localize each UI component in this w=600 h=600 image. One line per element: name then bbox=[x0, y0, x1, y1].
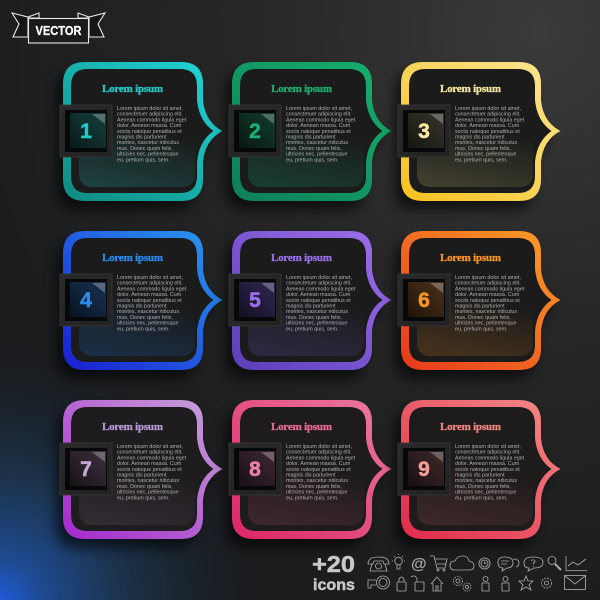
icon: magnifier bbox=[548, 556, 561, 570]
panel: card 1 bbox=[56, 62, 222, 210]
panel: card 8: Aenean commodo ligula eget bbox=[286, 455, 356, 461]
panel: card 5: magnis dis parturient bbox=[286, 304, 336, 310]
panel: card 6: 6 bbox=[418, 289, 430, 312]
icon: person two bbox=[502, 576, 509, 591]
panel: card 5: sociis natoque penatibus et bbox=[286, 298, 351, 304]
panel: card 1: Lorem ipsum bbox=[102, 83, 163, 95]
panel: card 7: ultricies nec, pellentesque bbox=[117, 490, 179, 496]
panel: card 9: ultricies nec, pellentesque bbox=[455, 490, 517, 496]
icon: padlock bbox=[397, 577, 406, 591]
panel: card 2: consectetuer adipiscing elit. bbox=[286, 112, 352, 118]
panel: card 9: Lorem ipsum bbox=[440, 421, 501, 433]
panel: card 6: Lorem ipsum bbox=[440, 252, 501, 264]
panel: card 2: magnis dis parturient bbox=[286, 134, 336, 140]
panel: card 6: Aenean commodo ligula eget bbox=[455, 286, 525, 292]
panel: card 8: 8 bbox=[249, 458, 261, 481]
panel: card 3: mus. Donec quam felis, bbox=[455, 146, 511, 152]
icon: at sign: @ bbox=[411, 556, 427, 573]
panel: card 8: mus. Donec quam felis, bbox=[286, 484, 342, 490]
panel: card 5: mus. Donec quam felis, bbox=[286, 315, 342, 321]
panel: card 6: ultricies nec, pellentesque bbox=[455, 321, 517, 327]
panel: card 1: magnis dis parturient bbox=[117, 134, 167, 140]
panel: card 4: montes, nascetur ridiculus bbox=[117, 309, 179, 315]
panel: card 1: dolor. Aenean massa. Cum bbox=[117, 123, 182, 129]
panel: card 4: magnis dis parturient bbox=[117, 304, 167, 310]
icon: envelope bbox=[564, 576, 586, 590]
panel: card 9: eu, pretium quis, sem. bbox=[455, 495, 508, 501]
panel: card 6: magnis dis parturient bbox=[455, 304, 505, 310]
panel: card 5: consectetuer adipiscing elit. bbox=[286, 281, 352, 287]
panel: card 5 bbox=[225, 231, 392, 379]
panel: card 8: magnis dis parturient bbox=[286, 472, 336, 478]
panel: card 7: consectetuer adipiscing elit. bbox=[117, 450, 183, 456]
panel: card 5: Aenean commodo ligula eget bbox=[286, 286, 356, 292]
panel: card 1: Lorem ipsum dolor sit amet, bbox=[117, 106, 183, 112]
panel: card 4: dolor. Aenean massa. Cum bbox=[117, 292, 182, 298]
panel: card 2 bbox=[225, 62, 392, 210]
panel: card 2: sociis natoque penatibus et bbox=[286, 129, 351, 135]
panel: card 8: sociis natoque penatibus et bbox=[286, 467, 351, 473]
+20 icons caption bbox=[312, 551, 355, 594]
icon: clock bbox=[479, 558, 490, 569]
panel: card 1: eu, pretium quis, sem. bbox=[117, 157, 170, 163]
panel: card 9: montes, nascetur ridiculus bbox=[455, 478, 517, 484]
panel: card 3: consectetuer adipiscing elit. bbox=[455, 112, 521, 118]
panel: card 2: eu, pretium quis, sem. bbox=[286, 157, 339, 163]
icon: key bbox=[368, 576, 390, 589]
panel: card 2: Lorem ipsum dolor sit amet, bbox=[286, 106, 352, 112]
panel: card 7: 7 bbox=[80, 458, 92, 481]
icon set bbox=[368, 554, 587, 591]
panel: card 1: 1 bbox=[80, 120, 92, 143]
panel: card 6: mus. Donec quam felis, bbox=[455, 315, 511, 321]
panel: card 4: ultricies nec, pellentesque bbox=[117, 321, 179, 327]
panel: card 3: montes, nascetur ridiculus bbox=[455, 140, 517, 146]
panel: card 1: sociis natoque penatibus et bbox=[117, 129, 182, 135]
panel: card 7: Lorem ipsum bbox=[102, 421, 163, 433]
icon: gears bbox=[454, 576, 471, 591]
panel: card 6: montes, nascetur ridiculus bbox=[455, 309, 517, 315]
icon: light bulb bbox=[392, 554, 405, 569]
panel: card 9: mus. Donec quam felis, bbox=[455, 484, 511, 490]
panel: card 8: Lorem ipsum bbox=[271, 421, 332, 433]
panel: card 9: Lorem ipsum dolor sit amet, bbox=[455, 444, 521, 450]
panel: card 3: Aenean commodo ligula eget bbox=[455, 117, 525, 123]
panel: card 4: mus. Donec quam felis, bbox=[117, 315, 173, 321]
panel: card 8: consectetuer adipiscing elit. bbox=[286, 450, 352, 456]
panel: card 8: dolor. Aenean massa. Cum bbox=[286, 461, 351, 467]
panel: card 2: mus. Donec quam felis, bbox=[286, 146, 342, 152]
panel: card 6: dolor. Aenean massa. Cum bbox=[455, 292, 520, 298]
panel: card 5: Lorem ipsum bbox=[271, 252, 332, 264]
panel: card 3: sociis natoque penatibus et bbox=[455, 129, 520, 135]
panel: card 5: dolor. Aenean massa. Cum bbox=[286, 292, 351, 298]
panel: card 6 bbox=[394, 231, 560, 379]
panel: card 9: magnis dis parturient bbox=[455, 472, 505, 478]
panel: card 3 bbox=[394, 62, 560, 210]
panel: card 5: montes, nascetur ridiculus bbox=[286, 309, 348, 315]
panel: card 5: 5 bbox=[249, 289, 261, 312]
panel: card 6: sociis natoque penatibus et bbox=[455, 298, 520, 304]
panel: card 9: consectetuer adipiscing elit. bbox=[455, 450, 521, 456]
panel: card 1: Aenean commodo ligula eget bbox=[117, 117, 187, 123]
icon: question bubble bbox=[524, 557, 543, 571]
panel: card 9: sociis natoque penatibus et bbox=[455, 467, 520, 473]
icon: telephone bbox=[368, 557, 389, 571]
panel: card 2: dolor. Aenean massa. Cum bbox=[286, 123, 351, 129]
panel: card 4: Lorem ipsum bbox=[102, 252, 163, 264]
icon: shopping cart bbox=[430, 556, 447, 571]
panel: card 8: Lorem ipsum dolor sit amet, bbox=[286, 444, 352, 450]
panel: card 1: mus. Donec quam felis, bbox=[117, 146, 173, 152]
panel: card 7: eu, pretium quis, sem. bbox=[117, 495, 170, 501]
panel: card 5: Lorem ipsum dolor sit amet, bbox=[286, 275, 352, 281]
+20 icons caption: icons bbox=[313, 577, 355, 594]
panel: card 3: eu, pretium quis, sem. bbox=[455, 157, 508, 163]
panel: card 3: dolor. Aenean massa. Cum bbox=[455, 123, 520, 129]
panel: card 2: ultricies nec, pellentesque bbox=[286, 152, 348, 158]
panel: card 2: Lorem ipsum bbox=[271, 83, 332, 95]
panel: card 7: mus. Donec quam felis, bbox=[117, 484, 173, 490]
panel: card 2: montes, nascetur ridiculus bbox=[286, 140, 348, 146]
panel: card 2: Aenean commodo ligula eget bbox=[286, 117, 356, 123]
panel: card 9: Aenean commodo ligula eget bbox=[455, 455, 525, 461]
icon: house bbox=[431, 577, 443, 591]
panel: card 6: eu, pretium quis, sem. bbox=[455, 326, 508, 332]
icon: star bbox=[519, 576, 533, 590]
panel: card 8: ultricies nec, pellentesque bbox=[286, 490, 348, 496]
icon: person one bbox=[482, 576, 489, 591]
panel: card 4 bbox=[56, 231, 222, 379]
panel: card 3: Lorem ipsum dolor sit amet, bbox=[455, 106, 521, 112]
icon: speech bubbles bbox=[498, 557, 519, 571]
panel: card 7: Aenean commodo ligula eget bbox=[117, 455, 187, 461]
+20 icons caption: +20 bbox=[312, 551, 355, 577]
icon: open padlock bbox=[411, 576, 424, 591]
vector ribbon badge bbox=[12, 13, 105, 43]
panel: card 7: montes, nascetur ridiculus bbox=[117, 478, 179, 484]
panel: card 7: sociis natoque penatibus et bbox=[117, 467, 182, 473]
panel: card 4: consectetuer adipiscing elit. bbox=[117, 281, 183, 287]
panel: card 6: consectetuer adipiscing elit. bbox=[455, 281, 521, 287]
icon: cloud bbox=[450, 556, 474, 570]
panel: card 6: Lorem ipsum dolor sit amet, bbox=[455, 275, 521, 281]
panel: card 4: Aenean commodo ligula eget bbox=[117, 286, 187, 292]
panel: card 7: dolor. Aenean massa. Cum bbox=[117, 461, 182, 467]
panel: card 3: ultricies nec, pellentesque bbox=[455, 152, 517, 158]
panel: card 3: magnis dis parturient bbox=[455, 134, 505, 140]
panel: card 9: dolor. Aenean massa. Cum bbox=[455, 461, 520, 467]
panel: card 4: 4 bbox=[80, 289, 92, 312]
panel: card 4: sociis natoque penatibus et bbox=[117, 298, 182, 304]
panel: card 9 bbox=[394, 400, 560, 548]
panel: card 1: consectetuer adipiscing elit. bbox=[117, 112, 183, 118]
panel: card 3: 3 bbox=[418, 120, 430, 143]
panel: card 8: eu, pretium quis, sem. bbox=[286, 495, 339, 501]
panel: card 7 bbox=[56, 400, 222, 548]
panel: card 7: Lorem ipsum dolor sit amet, bbox=[117, 444, 183, 450]
panel: card 1: ultricies nec, pellentesque bbox=[117, 152, 179, 158]
icon: line chart bbox=[566, 556, 587, 570]
panel: card 2: 2 bbox=[249, 120, 261, 143]
panel: card 3: Lorem ipsum bbox=[440, 83, 501, 95]
panel: card 5: ultricies nec, pellentesque bbox=[286, 321, 348, 327]
vector ribbon badge: VECTOR bbox=[36, 24, 82, 38]
panel: card 4: eu, pretium quis, sem. bbox=[117, 326, 170, 332]
panel: card 5: eu, pretium quis, sem. bbox=[286, 326, 339, 332]
icon: gear bbox=[542, 578, 552, 588]
panel: card 7: magnis dis parturient bbox=[117, 472, 167, 478]
panel: card 4: Lorem ipsum dolor sit amet, bbox=[117, 275, 183, 281]
panel: card 9: 9 bbox=[418, 458, 430, 481]
panel: card 8: montes, nascetur ridiculus bbox=[286, 478, 348, 484]
panel: card 1: montes, nascetur ridiculus bbox=[117, 140, 179, 146]
panel: card 8 bbox=[225, 400, 392, 548]
